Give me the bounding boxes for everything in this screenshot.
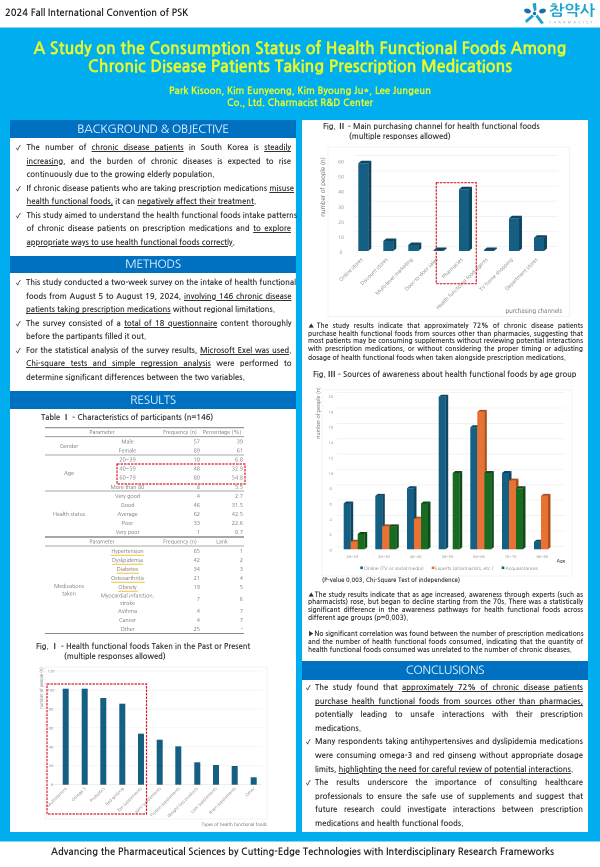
- chart: health functional foods taken: Omega 3: [70, 786, 87, 802]
- table: characteristics of participants: Male: [121, 439, 134, 445]
- text block: background bullets: [16, 144, 297, 247]
- footer tagline: Advancing the Pharmaceutical Sciences by Cutting-Edge Technologies with Interdisciplinary Research Frameworks: [51, 848, 554, 857]
- table: characteristics of participants: 21: [194, 575, 200, 581]
- heading: background and objective: [10, 120, 296, 138]
- chart: main purchasing channel: TV home shopping: [479, 257, 514, 292]
- table: characteristics of participants: 57: [194, 439, 200, 445]
- text block: methods bullets: ✓: [16, 280, 21, 286]
- text block: correlation finding: and the number of health functional foods consumed, indicating that the quantity of: [308, 639, 583, 646]
- chart: sources of awareness by age group: 50~59: [441, 555, 454, 559]
- text block: figure 3 interpretation: [308, 591, 583, 622]
- table: characteristics of participants: stroke: [120, 600, 135, 606]
- chart: sources of awareness by age group: 40~49: [410, 555, 422, 559]
- text block: figure 3 interpretation: significant difference in the awareness pathways for health functional foods across: [308, 607, 583, 614]
- chart: health functional foods taken: Multivitamins: [46, 786, 68, 808]
- icon: Charmacist logo: [524, 2, 595, 24]
- table: characteristics of participants: Frequency (n): [163, 429, 197, 435]
- chart: sources of awareness by age group: 6: [330, 502, 333, 506]
- table: characteristics of participants: Parameter: [89, 539, 115, 545]
- chart: health functional foods taken: [39, 666, 268, 827]
- chart: main purchasing channel: 0: [340, 250, 343, 255]
- text block: background bullets: If chronic disease patients who are taking prescription medications misuse: [26, 184, 294, 192]
- 3D bars: [358, 161, 547, 251]
- heading: results: [10, 391, 296, 408]
- table: characteristics of participants: 6: [240, 596, 243, 602]
- panel: right column figures: [302, 120, 588, 661]
- icon: Charmacist logo: 참약사: [549, 2, 595, 18]
- title: Chronic Disease Patients Taking Prescription Medications: [88, 59, 512, 75]
- table: characteristics of participants: 34: [194, 566, 201, 572]
- chart: health functional foods taken: Weight-loss products: [166, 786, 199, 819]
- chart: sources of awareness by age group: 0: [330, 549, 333, 553]
- table: characteristics of participants: 5: [240, 584, 243, 590]
- authors and affiliation: Park Kisoon, Kim Eunyeong, Kim Byoung Ju*, Lee Jungeun: [169, 87, 431, 96]
- legend: Online (TV or social media): [364, 566, 424, 571]
- chart: sources of awareness by age group: 2: [330, 533, 332, 537]
- heading: methods: METHODS: [125, 258, 181, 270]
- table: characteristics of participants: Female: [119, 448, 136, 454]
- table: characteristics of participants: Percentage (%): [203, 429, 241, 435]
- chart: health functional foods taken: 60: [49, 726, 54, 730]
- text block: methods bullets: ✓: [16, 320, 21, 326]
- text block: conclusions bullets: future research could investigate interactions between prescription: [315, 806, 583, 814]
- table: characteristics of participants: 5.5: [235, 484, 243, 490]
- table: characteristics of participants: 1: [240, 548, 243, 554]
- chart: main purchasing channel: purchasing channels: [505, 308, 562, 314]
- bars: [63, 689, 257, 785]
- heading: background and objective: BACKGROUND & OBJECTIVE: [77, 123, 229, 135]
- table: characteristics of participants: 25: [194, 626, 200, 632]
- table: characteristics of participants: Gender: [60, 443, 78, 449]
- chart: health functional foods taken: 0: [51, 783, 54, 787]
- table: characteristics of participants: 48: [194, 466, 200, 472]
- text block: conclusions bullets: professionals to ensure the safe use of supplements and suggest that: [315, 793, 583, 801]
- title: A Study on the Consumption Status of Health Functional Foods Among: [34, 41, 566, 57]
- text block: figure 2 interpretation: dosage of health functional foods when taken alongside prescription medications.: [308, 354, 566, 362]
- table: characteristics of participants: Good: [121, 502, 134, 508]
- chart: health functional foods taken: 80: [49, 708, 54, 712]
- table: characteristics of participants: Dyslipidemia: [112, 557, 143, 563]
- text block: methods bullets: foods from August 5 to August 19, 2024, involving 146 chronic disease: [26, 292, 292, 300]
- table: characteristics of participants: taken: [62, 590, 76, 596]
- table: characteristics of participants: 31.5: [232, 502, 243, 508]
- text block: background bullets: of chronic disease patients on prescription medications and to explore: [26, 225, 291, 233]
- chart: health functional foods taken: Probiotics: [89, 786, 106, 803]
- table: characteristics of participants: 4: [240, 575, 244, 581]
- chart: health functional foods taken: Protein supplements: [149, 786, 181, 818]
- text block: figure 2 interpretation: most patients may be consuming supplements without reviewing potential interactions: [308, 338, 583, 345]
- panel: background and objective: [10, 120, 296, 256]
- table: characteristics of participants: Lank: [216, 539, 228, 545]
- table: characteristics of participants: Hypertension: [111, 548, 144, 554]
- text block: background bullets: This study aimed to understand the health functional foods intake patterns: [26, 212, 297, 220]
- p-value note: (P-value 0.003, Chi-Square Test of independence): [322, 577, 460, 583]
- table: characteristics of participants: 54.8: [232, 475, 243, 481]
- text block: figure 3 interpretation: pharmacists) rose, but began to decline starting from the 70s. There was a statistically: [308, 599, 583, 606]
- table: characteristics of participants: 7: [240, 608, 243, 614]
- text block: correlation finding: [308, 630, 584, 654]
- table: characteristics of participants: 2: [240, 557, 243, 563]
- text block: background bullets: ✓: [16, 212, 21, 218]
- text block: methods bullets: This study conducted a two-week survey on the intake of health functional: [26, 279, 296, 287]
- text block: figure 2 interpretation: purchase health functional foods from sources other than pharmacies, suggesting that: [308, 331, 583, 338]
- text block: conclusions bullets: ✓: [306, 739, 311, 745]
- table: characteristics of participants: 7: [197, 596, 200, 602]
- chart: sources of awareness by age group: number of people (n): [316, 387, 321, 439]
- chart: main purchasing channel: Department stores: [504, 257, 539, 292]
- figure 2 title: Fig. Ⅱ – Main purchasing channel for health functional foods: [323, 124, 540, 131]
- table: characteristics of participants: Obesity: [118, 584, 137, 590]
- table title: Table Ⅰ – Characteristics of participants (n=146): [41, 415, 213, 422]
- chart: main purchasing channel: 20: [338, 220, 344, 225]
- chart: main purchasing channel: 40: [338, 190, 344, 195]
- figure 1 title: Fig. Ⅰ – Health functional foods Taken in the Past or Present: [36, 644, 250, 651]
- authors and affiliation: [169, 86, 431, 108]
- chart: health functional foods taken: 100: [48, 688, 55, 692]
- chart: main purchasing channel: 30: [338, 205, 344, 210]
- chart: main purchasing channel: number of people (n): [320, 157, 326, 217]
- chart: sources of awareness by age group: 20~29: [346, 555, 359, 559]
- chart: sources of awareness by age group: 8: [330, 487, 333, 491]
- panel: conclusions: [302, 661, 588, 832]
- text block: methods bullets: determine significant differences between the two variables.: [26, 374, 245, 382]
- table: characteristics of participants: 42.5: [232, 511, 243, 517]
- title: [34, 40, 566, 75]
- chart: sources of awareness by age group: 10: [328, 472, 334, 476]
- chart: sources of awareness by age group: 14: [328, 441, 334, 445]
- table: characteristics of participants: 80: [194, 475, 200, 481]
- table: characteristics of participants: 10: [194, 457, 200, 463]
- legend: Experts (pharmacists, etc.): [435, 566, 494, 571]
- text block: conclusions bullets: were consuming omega-3 and red ginseng without appropriate dosage: [315, 752, 583, 760]
- figure 1 title: [36, 642, 250, 660]
- heading: conclusions: [302, 661, 588, 680]
- table: characteristics of participants: 40~59: [119, 466, 136, 472]
- text block: conclusions bullets: medications.: [315, 725, 361, 733]
- text block: conclusions bullets: medications and health functional foods.: [315, 820, 463, 828]
- chart: sources of awareness by age group: 12: [328, 456, 333, 460]
- table: characteristics of participants: 2.7: [235, 493, 243, 499]
- panel: methods: [10, 256, 296, 391]
- heading: methods: [10, 256, 296, 273]
- table: characteristics of participants: Frequency (n): [163, 539, 197, 545]
- table: characteristics of participants: 22.6: [232, 520, 243, 526]
- table: characteristics of participants: 0.7: [235, 529, 243, 535]
- heading: conclusions: CONCLUSIONS: [406, 664, 484, 676]
- chart: sources of awareness by age group: 80~89: [536, 555, 549, 559]
- text block: conclusions bullets: ✓: [306, 685, 311, 691]
- table: characteristics of participants: Other: [120, 626, 135, 632]
- table: characteristics of participants: 61: [237, 448, 243, 454]
- table: characteristics of participants: 46: [194, 502, 200, 508]
- chart: health functional foods taken: Other: [244, 786, 256, 798]
- table: characteristics of participants: -: [241, 626, 243, 632]
- chart: sources of awareness by age group: 4: [330, 518, 333, 522]
- heading: results: RESULTS: [130, 394, 176, 406]
- text block: figure 2 interpretation: ▲The study results indicate that approximately 72% of chronic disease patients: [308, 323, 583, 330]
- chart: sources of awareness by age group: 30~39: [378, 555, 391, 559]
- figure 2 title: [323, 122, 540, 140]
- text block: methods bullets: patients taking prescription medications without regional limitations.: [26, 306, 275, 314]
- table: characteristics of participants: Asthma: [118, 608, 137, 614]
- table: characteristics of participants: 4: [197, 608, 201, 614]
- table: characteristics of participants: 1: [197, 529, 200, 535]
- text block: methods bullets: Chi-square tests and simple regression analysis were performed to: [26, 360, 292, 368]
- table: characteristics of participants: Poor: [122, 520, 133, 526]
- chart: health functional foods taken: Red ginseng: [104, 786, 125, 807]
- text block: methods bullets: ✓: [16, 348, 21, 354]
- chart: main purchasing channel: Multi-level marketing: [375, 257, 414, 296]
- text block: background bullets: increasing, and the burden of chronic diseases is expected to rise: [26, 158, 291, 166]
- text block: methods bullets: [16, 278, 296, 382]
- text block: conclusions bullets: purchase health functional foods from sources other than pharmacies,: [315, 698, 583, 706]
- icon: Charmacist logo: CHARMACIST: [549, 20, 592, 24]
- chart: main purchasing channel: 60: [338, 160, 344, 164]
- legend: Acquaintances: [505, 566, 538, 571]
- chart: main purchasing channel: Discount stores: [360, 257, 389, 286]
- text block: conclusions bullets: Many respondents taking antihypertensives and dyslipidemia medications: [315, 738, 583, 746]
- table: characteristics of participants: Myocardial infarction,: [101, 592, 155, 598]
- figure 3 title: Fig. Ⅲ – Sources of awareness about health functional foods by age group: [313, 372, 576, 379]
- chart: health functional foods taken: Types of health functional foods: [202, 822, 267, 827]
- text block: background bullets: The number of chronic disease patients in South Korea is steadily: [26, 144, 291, 152]
- 3D grouped bars: [344, 395, 550, 549]
- text block: background bullets: continuously due to the growing elderly population.: [26, 171, 215, 179]
- text block: figure 3 interpretation: ▲The study results indicate that as age increased, awareness through experts (such as: [308, 592, 583, 598]
- chart: main purchasing channel: Pharmacies: [441, 257, 464, 280]
- text block: background bullets: ✓: [16, 145, 21, 151]
- authors and affiliation: Co., Ltd. Charmacist R&D Center: [227, 98, 373, 108]
- chart: health functional foods taken: Joint supplements: [133, 786, 162, 814]
- legend: [360, 566, 538, 571]
- chart: main purchasing channel: Door-to-door sales: [404, 257, 439, 292]
- table: characteristics of participants: 62: [194, 511, 200, 517]
- table: characteristics of participants: 32.9: [232, 466, 243, 472]
- chart: health functional foods taken: Liver supplements: [190, 786, 218, 814]
- chart: health functional foods taken: 20: [49, 764, 54, 768]
- text block: conclusions bullets: [306, 684, 583, 828]
- table: characteristics of participants: 6.8: [235, 457, 243, 463]
- table: characteristics of participants: 89: [194, 448, 200, 454]
- chart: sources of awareness by age group: 18: [328, 410, 334, 414]
- text block: figure 2 interpretation: [308, 322, 583, 362]
- table: characteristics of participants: 7: [240, 617, 243, 623]
- text block: conclusions bullets: ✓: [306, 780, 311, 786]
- table: characteristics of participants: 3: [240, 566, 243, 572]
- chart: health functional foods taken: Brain supplements: [208, 786, 237, 815]
- table: characteristics of participants: 8: [197, 484, 200, 490]
- chart: sources of awareness by age group: 20: [328, 395, 334, 399]
- table: characteristics of participants: 65: [194, 548, 200, 554]
- panel: results: [10, 391, 296, 832]
- table: characteristics of participants: 60~79: [119, 475, 136, 481]
- chart: main purchasing channel: Online stores: [338, 257, 364, 282]
- table: characteristics of participants: Very good: [115, 493, 140, 499]
- figure 2 title: (multiple responses allowed): [349, 134, 451, 140]
- text block: figure 3 interpretation: different age groups (p=0.003).: [308, 615, 408, 622]
- table: characteristics of participants: Medications: [54, 583, 85, 589]
- table: characteristics of participants: 33: [194, 520, 200, 526]
- text block: background bullets: health functional foods, it can negatively affect their treatment.: [26, 198, 256, 206]
- chart: health functional foods taken: 40: [49, 745, 54, 749]
- table: characteristics of participants: [45, 427, 246, 634]
- chart: health functional foods taken: number of people (n): [39, 667, 44, 709]
- text block: conclusions bullets: The results underscore the importance of consulting healthcare: [315, 779, 583, 787]
- table: characteristics of participants: 42: [194, 557, 200, 563]
- text block: conclusions bullets: potentially leading to unsafe interactions with their prescription: [315, 711, 583, 719]
- chart: main purchasing channel: [320, 146, 570, 317]
- table: characteristics of participants: 39: [237, 439, 243, 445]
- text block: background bullets: ✓: [16, 186, 21, 192]
- chart: health functional foods taken: 120: [48, 670, 55, 674]
- text block: background bullets: appropriate ways to use health functional foods correctly.: [26, 238, 235, 246]
- chart: main purchasing channel: Health functional food agents: [435, 257, 489, 310]
- chart: sources of awareness by age group: 70~79: [505, 555, 517, 559]
- table: characteristics of participants: Cancer: [119, 617, 136, 623]
- table: characteristics of participants: Diabetes: [117, 566, 139, 572]
- table: characteristics of participants: More than 80: [111, 484, 144, 490]
- figure 1 title: (multiple responses allowed): [64, 654, 166, 660]
- table: characteristics of participants: 4: [197, 617, 201, 623]
- table: characteristics of participants: Osteoarthritis: [111, 575, 145, 581]
- table: characteristics of participants: 20~39: [119, 457, 136, 463]
- table: characteristics of participants: Age: [64, 470, 74, 476]
- text block: methods bullets: The survey consisted of a total of 18 questionnaire content thoroughly: [26, 320, 292, 328]
- chart: main purchasing channel: 50: [338, 175, 344, 180]
- text block: methods bullets: before the partipants filled it out.: [26, 333, 146, 341]
- table: characteristics of participants: Very poor: [116, 529, 139, 535]
- chart: sources of awareness by age group: 60~69: [473, 555, 486, 559]
- table: characteristics of participants: Parameter: [89, 429, 115, 435]
- table: characteristics of participants: 4: [197, 493, 201, 499]
- chart: sources of awareness by age group: [316, 387, 572, 576]
- chart: sources of awareness by age group: Age: [557, 558, 566, 564]
- text block: correlation finding: ▶No significant correlation was found between the number of prescription medications: [308, 631, 584, 638]
- table: characteristics of participants: Health status: [53, 511, 86, 517]
- text block: correlation finding: health functional foods consumed was unrelated to the number of chronic diseases.: [308, 647, 572, 654]
- chart: sources of awareness by age group: 16: [328, 426, 334, 430]
- chart: main purchasing channel: 10: [338, 235, 344, 240]
- conference name: 2024 Fall International Convention of PSK: [5, 9, 188, 18]
- table: characteristics of participants: 19: [194, 584, 200, 590]
- table: characteristics of participants: Average: [117, 511, 138, 517]
- text block: figure 2 interpretation: with prescription medications, or without considering the proper timing or adjusting: [308, 346, 583, 353]
- chart: health functional foods taken: Eye supplements: [116, 786, 143, 813]
- text block: conclusions bullets: limits, highlighting the need for careful review of potential interactions.: [315, 766, 573, 774]
- text block: conclusions bullets: The study found that approximately 72% of chronic disease patients: [315, 684, 583, 692]
- text block: methods bullets: For the statistical analysis of the survey results, Microsoft Exel was used.: [26, 346, 292, 354]
